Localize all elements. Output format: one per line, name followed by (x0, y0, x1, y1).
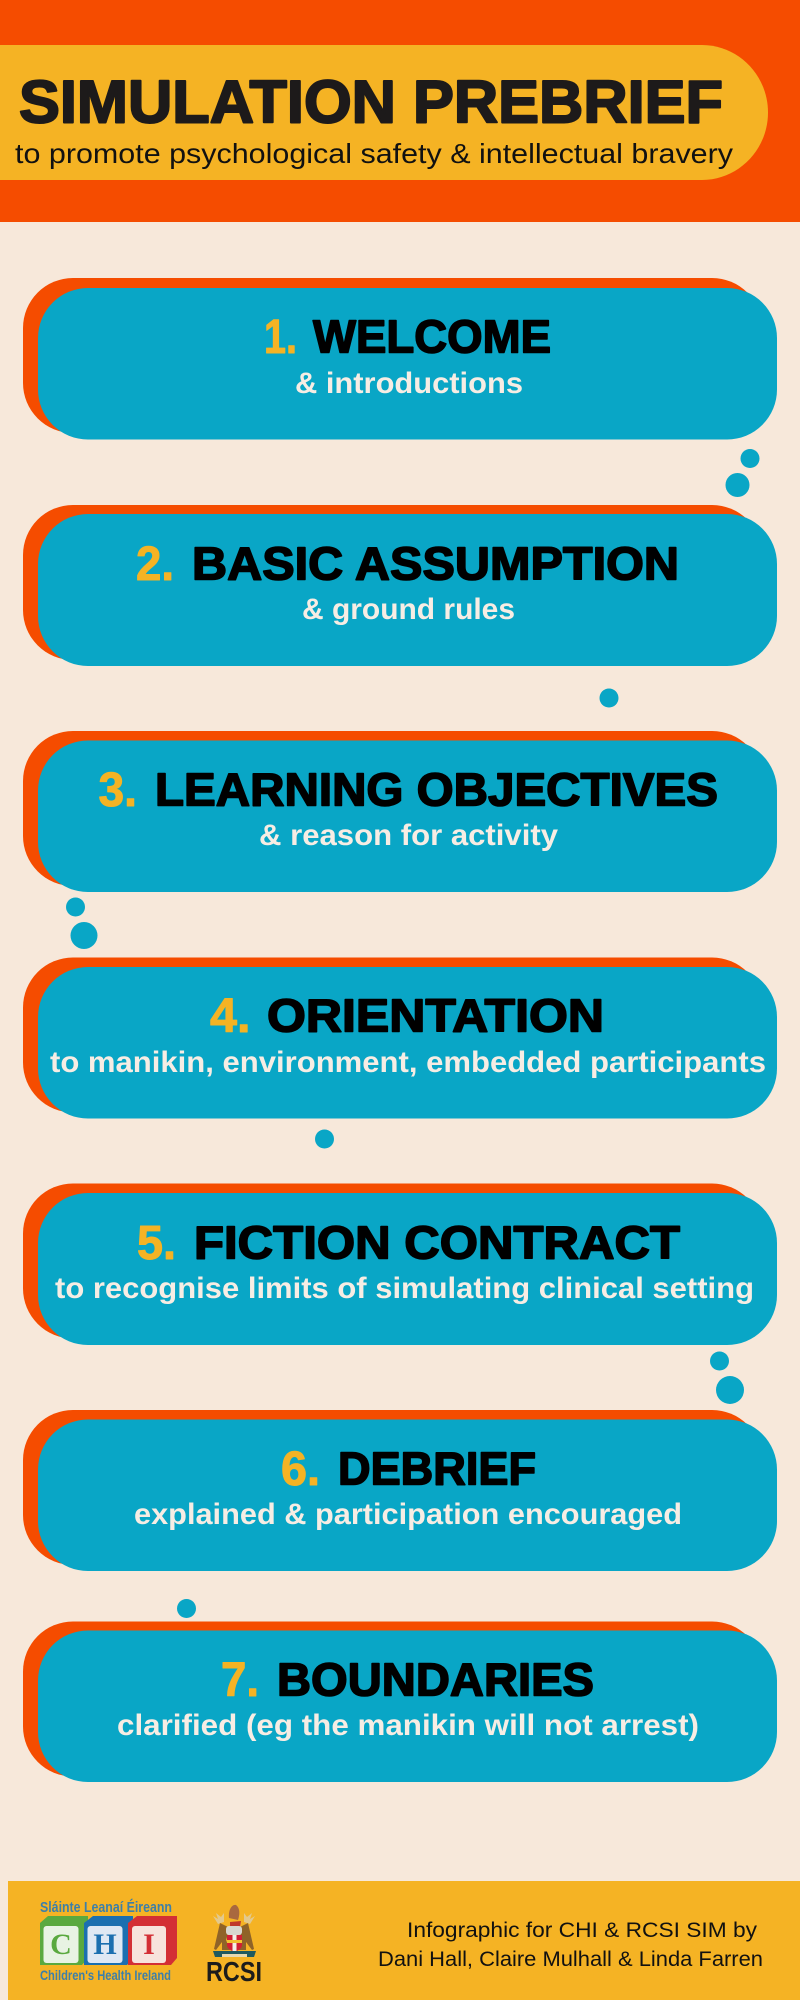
card body (38, 967, 777, 1118)
step heading: BOUNDARIES (277, 1654, 594, 1706)
subtitle: to promote psychological safety & intellectual bravery (15, 138, 733, 169)
step description: to recognise limits of simulating clinical setting (55, 1272, 754, 1305)
card shadow (23, 958, 762, 1112)
step heading: DEBRIEF (338, 1442, 536, 1494)
step heading: BASIC ASSUMPTION (192, 538, 679, 590)
card body (38, 514, 777, 666)
card shadow (23, 505, 762, 660)
step heading: FICTION CONTRACT (194, 1216, 680, 1268)
step 4 card: orientation (23, 958, 777, 1118)
header band (0, 0, 800, 222)
credits line 1: Infographic for CHI & RCSI SIM by (407, 1918, 757, 1942)
title: SIMULATION PREBRIEF (19, 68, 723, 136)
CHI logo (40, 1899, 177, 1983)
credits text (378, 1918, 763, 1971)
red I block: I (143, 1928, 155, 1961)
step number: 7. (221, 1654, 259, 1707)
step description: explained & participation encouraged (134, 1498, 682, 1531)
step number: 2. (136, 538, 174, 591)
step number: 6. (281, 1443, 320, 1496)
RCSI logo (206, 1905, 262, 1987)
card body (38, 1630, 777, 1782)
step 3 card: learning objectives (23, 731, 777, 892)
small bubble (740, 449, 760, 468)
step number: 3. (98, 764, 137, 817)
small bubble (66, 898, 85, 916)
blue H block: H (93, 1928, 117, 1961)
step number: 4. (210, 990, 250, 1043)
card shadow (23, 1622, 762, 1776)
logo English name: Children's Health Ireland (40, 1968, 171, 1983)
step description: clarified (eg the manikin will not arrest) (117, 1709, 699, 1742)
header orange background (0, 0, 800, 222)
card body (38, 288, 777, 440)
step heading: WELCOME (313, 310, 551, 362)
large bubble (716, 1376, 744, 1404)
step 6 card: debrief (23, 1410, 777, 1571)
step heading: LEARNING OBJECTIVES (155, 764, 718, 816)
thought bubbles after step 3 (66, 898, 98, 949)
step number: 5. (137, 1217, 176, 1270)
thought bubbles after step 1 (726, 449, 760, 497)
step 2 card: basic assumption (23, 505, 777, 666)
thought bubble after step 6 (177, 1599, 196, 1618)
RCSI wordmark: RCSI (206, 1956, 262, 1987)
step 1 card: welcome (23, 278, 777, 440)
step 7 card: boundaries (23, 1622, 777, 1782)
step heading: ORIENTATION (267, 990, 604, 1042)
step description: to manikin, environment, embedded participants (50, 1046, 766, 1079)
card body (38, 740, 777, 892)
green C block: C (50, 1928, 72, 1961)
card shadow (23, 1184, 762, 1338)
small bubble (710, 1352, 729, 1370)
header yellow pill (0, 45, 768, 180)
step description: & reason for activity (259, 819, 558, 852)
card shadow (23, 278, 762, 433)
card body (38, 1193, 777, 1345)
thought bubble after step 4 (315, 1130, 334, 1148)
card shadow (23, 1410, 762, 1565)
footer band (8, 1881, 800, 2000)
large bubble (726, 473, 750, 497)
credits line 2: Dani Hall, Claire Mulhall & Linda Farren (378, 1947, 763, 1971)
card body (38, 1420, 777, 1571)
step description: & ground rules (302, 593, 515, 626)
footer yellow background (8, 1881, 800, 2000)
thought bubbles after step 5 (710, 1352, 744, 1404)
large bubble (70, 922, 98, 949)
step description: & introductions (295, 367, 523, 400)
thought bubble after step 2 (600, 688, 618, 708)
card shadow (23, 731, 762, 886)
logo Irish name: Sláinte Leanaí Éireann (40, 1899, 172, 1916)
RCSI crest (213, 1905, 256, 1957)
step number: 1. (264, 311, 297, 364)
step 5 card: fiction contract (23, 1184, 777, 1345)
